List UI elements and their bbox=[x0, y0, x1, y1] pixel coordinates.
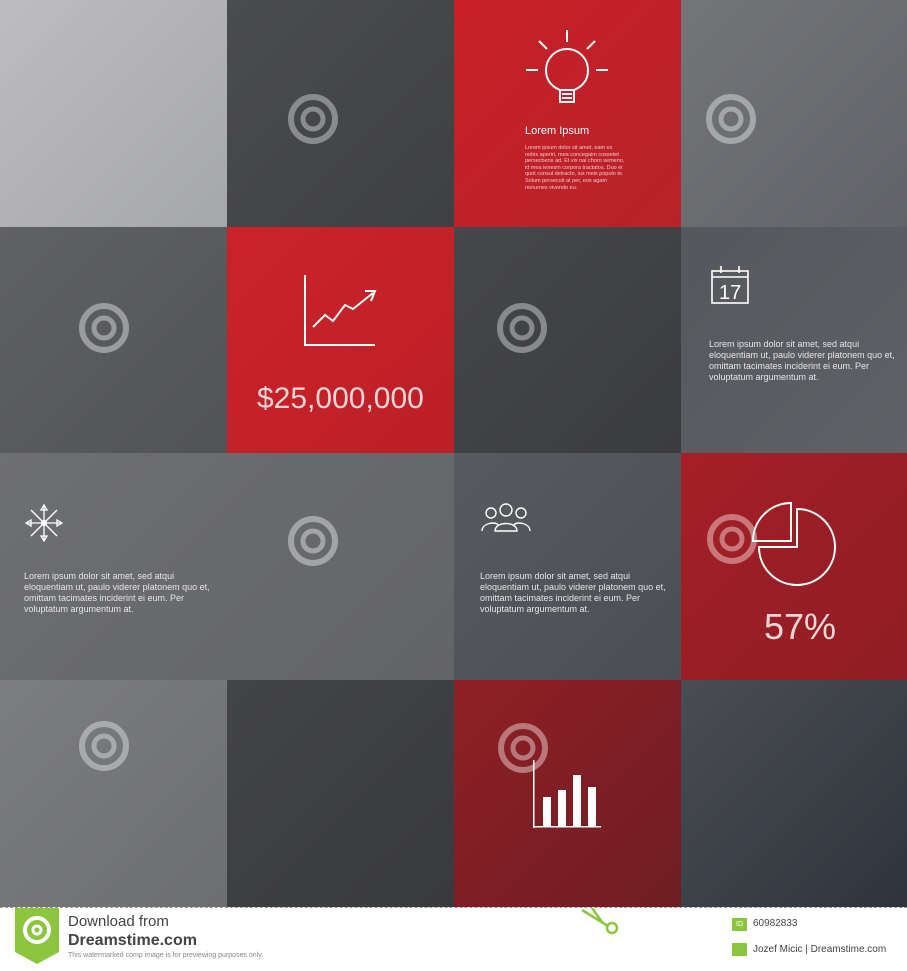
panel: calendar bbox=[681, 227, 907, 453]
panel: wide directions bbox=[0, 453, 454, 680]
text: dreamstime.com: Dreamstime.com bbox=[68, 932, 197, 949]
panel: row1 col4 gray bbox=[681, 0, 907, 227]
icon: line chart bbox=[304, 275, 376, 346]
panel: row2 col3 dark bbox=[454, 227, 681, 453]
icon: spiral watermark bbox=[706, 94, 756, 144]
icon: spiral watermark bbox=[79, 721, 129, 771]
icon: bar chart bbox=[533, 760, 601, 828]
text: image id bbox=[732, 918, 798, 931]
stat: $25,000,000: $25,000,000 bbox=[257, 382, 424, 415]
text block: Lorem ipsum dolor sit amet, sed atqui eloquentiam ut, paulo viderer platonem quo et, omittam tacimates inciderint ei eum. Per voluptatum argumentum at. bbox=[480, 571, 666, 614]
icon: spiral watermark bbox=[79, 303, 129, 353]
icon: scissors bbox=[581, 908, 618, 934]
icon: spiral watermark bbox=[497, 303, 547, 353]
icon: spiral watermark bbox=[707, 514, 757, 564]
panel: row4 col2 bbox=[227, 680, 454, 907]
icon: spiral watermark bbox=[498, 723, 548, 773]
panel: row1 col1 light gray bbox=[0, 0, 227, 227]
stat: 57%: 57% bbox=[764, 606, 836, 647]
icon: lightbulb bbox=[526, 30, 608, 103]
panel: pie 57% bbox=[681, 453, 907, 680]
icon: people bbox=[481, 503, 531, 532]
icon: pie chart bbox=[752, 502, 836, 586]
panel: row2 col1 gray bbox=[0, 227, 227, 453]
panel: row4 col4 bbox=[681, 680, 907, 907]
icon: arrows compass bbox=[24, 504, 64, 542]
text block: Lorem ipsum dolor sit amet, eam ex nobis aperiri, mea concegaim cossetet persecbens ad. Et vix nai choro semeno, id mea ienesm corpora tractatos. Duo ei quot consul detracto, ius meis populo te. Solum persecuti at per, eos agam nonumes vivendo eu. bbox=[525, 145, 624, 191]
heading: Lorem Ipsum: Lorem Ipsum bbox=[525, 125, 589, 137]
icon: spiral watermark bbox=[288, 516, 338, 566]
icon: calendar 17: 17 bbox=[719, 282, 741, 304]
text: image id: ID bbox=[736, 921, 743, 928]
panel: row4 col1 bbox=[0, 680, 227, 907]
icon: calendar 17 bbox=[711, 266, 749, 304]
text block: Lorem ipsum dolor sit amet, sed atqui eloquentiam ut, paulo viderer platonem quo et, omittam tacimates inciderint ei eum. Per voluptatum argumentum at. bbox=[709, 339, 895, 382]
panel: row1 col2 dark bbox=[227, 0, 454, 227]
text: download from: Download from bbox=[68, 913, 169, 930]
text: image id: 60982833 bbox=[753, 918, 798, 929]
text block: Lorem ipsum dolor sit amet, sed atqui eloquentiam ut, paulo viderer platonem quo et, omittam tacimates inciderint ei eum. Per voluptatum argumentum at. bbox=[24, 571, 210, 614]
panel: lightbulb red bbox=[454, 0, 681, 227]
panel: team bbox=[454, 453, 681, 680]
text: disclaimer: This watermarked comp image is for previewing purposes only. bbox=[68, 952, 263, 959]
footer bbox=[0, 907, 907, 971]
panel: bar chart bbox=[454, 680, 681, 907]
text: author: Jozef Micic | Dreamstime.com bbox=[753, 944, 886, 955]
icon: spiral watermark bbox=[288, 94, 338, 144]
icon: dreamstime logo bbox=[15, 908, 59, 964]
panel: growth red bbox=[227, 227, 454, 453]
